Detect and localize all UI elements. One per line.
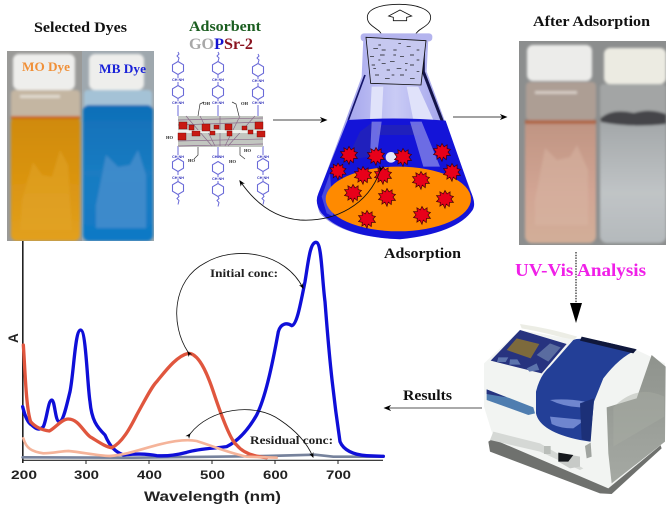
amide labels: CH NH [172, 101, 184, 105]
amide labels: CH NH [172, 176, 184, 180]
amide labels: CH NH [212, 155, 224, 159]
series: residual MO light [23, 438, 277, 458]
illustration: Erlenmeyer flask [317, 4, 474, 239]
glass highlights [370, 87, 433, 120]
orange phase [326, 167, 471, 231]
diagram: GOPSr-2 structure [166, 52, 269, 206]
illustration: spectrophotometer [484, 324, 666, 494]
x tick labels: 600 [263, 470, 288, 482]
vial: MO dye orange [11, 54, 80, 241]
functional groups: HO [166, 135, 174, 140]
spade icon [389, 10, 412, 21]
front latch [585, 443, 592, 458]
stopper knob [367, 4, 431, 35]
amide labels: CH NH [257, 176, 269, 180]
curved arrow: flask back to adsorbent [240, 171, 380, 220]
blue solution [317, 118, 474, 239]
x axis title: Wavelength (nm) [144, 488, 281, 504]
graphene oxide sheet [178, 116, 263, 147]
functional groups: HO [229, 159, 237, 164]
amide labels: CH NH [172, 78, 184, 82]
series: residual MB grey [23, 455, 383, 458]
control panel [491, 330, 567, 373]
label: MO Dye: MO Dye [22, 59, 70, 74]
callout: Initial conc: Initial conc: [210, 268, 278, 280]
axes [22, 241, 383, 464]
amide labels: CH NH [252, 101, 264, 105]
amide labels: CH NH [212, 101, 224, 105]
amide labels: CH NH [212, 177, 224, 181]
label: Adsorption: Adsorption [384, 246, 462, 262]
heading: Adsorbent: Adsorbent [189, 19, 261, 35]
functional groups [166, 101, 252, 164]
amide labels: CH NH [257, 155, 269, 159]
x tick labels [11, 470, 351, 482]
amide labels: CH NH [252, 79, 264, 83]
dye particles [330, 143, 460, 228]
functional groups: HO [188, 158, 196, 163]
series: initial MO red [23, 345, 267, 458]
spectra [23, 242, 383, 458]
x tick labels: 500 [200, 470, 225, 482]
functional groups: OH [241, 101, 249, 106]
photo: selected dye vials [7, 51, 154, 241]
stopper mesh [366, 37, 426, 85]
heading: After Adsorption: After Adsorption [533, 14, 651, 30]
amide labels [172, 78, 269, 181]
x tick labels: 700 [326, 470, 351, 482]
functional groups: OH [203, 101, 211, 106]
arc arrows: initial [177, 253, 303, 352]
amide labels: CH NH [172, 155, 184, 159]
arrow: dotted to spectrophotometer [570, 252, 582, 323]
functional groups: HO [244, 148, 252, 153]
photo: vials after adsorption [519, 41, 666, 245]
amide labels: CH NH [212, 78, 224, 82]
heading: GOPSr-2: GOPSr-2 [189, 36, 253, 53]
printer base shadow [488, 438, 662, 494]
arrow: flask to after adsorption [453, 116, 506, 118]
body white [484, 330, 665, 488]
arrow: Results [385, 407, 482, 409]
chart: UV-Vis spectra [6, 241, 383, 504]
callout: Residual conc: Residual conc: [250, 435, 333, 447]
arc arrows: residual [190, 410, 313, 457]
polymer chains [172, 52, 268, 206]
strontium particles [178, 122, 265, 140]
blue slot [487, 389, 535, 415]
label: Results: Results [403, 388, 452, 404]
flask glass [317, 38, 474, 239]
heading: Selected Dyes: Selected Dyes [34, 20, 127, 36]
x tick labels: 400 [137, 470, 162, 482]
vial: MB dye blue [83, 54, 153, 241]
x tick labels: 200 [11, 470, 37, 482]
side panel [607, 355, 666, 483]
vial: treated MO [525, 45, 596, 243]
x tick labels: 300 [74, 470, 99, 482]
blue lid [536, 339, 637, 442]
label: MB Dye: MB Dye [99, 61, 146, 76]
arrow: adsorbent to flask [273, 119, 326, 121]
y axis label: A [6, 333, 21, 343]
label: UV-Vis Analysis: UV-Vis Analysis [515, 260, 646, 280]
vial: treated MB [600, 48, 666, 243]
series: initial MB blue [23, 242, 383, 456]
